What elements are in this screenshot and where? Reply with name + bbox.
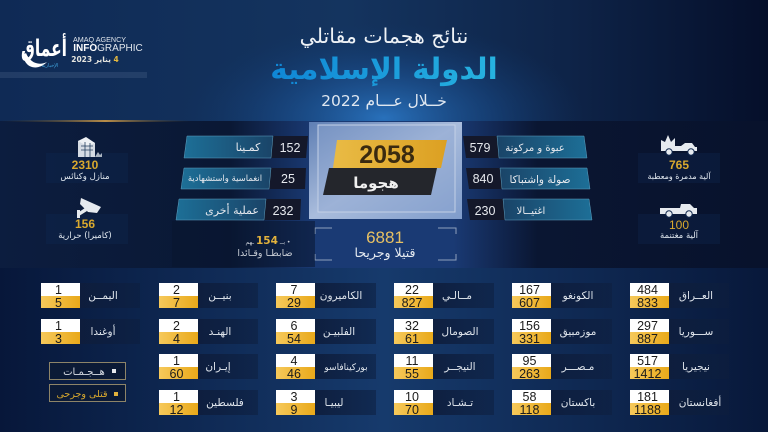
row: ambush: 152 (280, 141, 300, 155)
icon: Amaq calligraphy logo: أعماق (21, 31, 67, 62)
country: Chad: تـشـاد (447, 397, 473, 409)
black bar: attacks label: هجوما (353, 174, 399, 192)
icon: Amaq calligraphy logo: الإخبارية (42, 63, 58, 69)
country: Nigeria: 1412 (634, 367, 661, 381)
country: Philippines: الفلبيـن (323, 326, 355, 338)
country: Mozambique (512, 319, 612, 346)
row: explosive devices: 579 (470, 141, 490, 155)
country: Mali (394, 283, 494, 310)
country: Burkina Faso: 4 (291, 354, 298, 368)
country: Palestine (159, 390, 258, 417)
stat: thermal cameras: (كاميرا) حرارية (58, 231, 112, 241)
country: Palestine: 12 (170, 403, 183, 417)
country: Mali: 827 (402, 296, 422, 310)
country: Burkina Faso: 46 (287, 367, 301, 381)
row: assassination (467, 199, 592, 220)
panel: killed and wounded (315, 228, 456, 261)
country: Syria (630, 319, 729, 346)
stat: homes and churches (46, 137, 128, 183)
country: Benin: 7 (173, 296, 180, 310)
country: Yemen (41, 283, 140, 310)
country: Palestine: فلسطين (206, 397, 244, 409)
agency name: AMAQ AGENCY (73, 35, 126, 44)
row: suicide operations: انغماسية واستشهادية (188, 174, 262, 184)
column: Mali to Chad (394, 283, 494, 417)
country: Cameroon: 7 (291, 283, 298, 297)
row: assassination: اغتيــالا (517, 206, 545, 217)
country: Yemen: اليمــن (88, 290, 118, 302)
country: India: الهنـد (209, 326, 231, 338)
country: Egypt: 95 (523, 354, 536, 368)
country: Somalia: الصومال (441, 326, 479, 338)
stat: seized vehicles: 100 (669, 218, 689, 232)
country: Niger: النيجــر (443, 361, 476, 373)
stat: seized vehicles: آلية مغتنمة (660, 229, 699, 241)
country: Nigeria: نيجيريا (682, 361, 710, 373)
country: Philippines (276, 319, 376, 346)
country: Libya: 9 (291, 403, 298, 417)
country: Iran: إيـران (205, 361, 231, 373)
country: Libya: 3 (291, 390, 298, 404)
stat: homes and churches: 2310 (72, 158, 99, 172)
country: Niger: 55 (405, 367, 419, 381)
title (270, 24, 498, 110)
stat: seized vehicles (638, 204, 720, 244)
officers note (172, 221, 315, 267)
stat: homes and churches: منازل وكنائس (60, 172, 110, 182)
legend: killed and wounded: قتلى وجرحى (57, 389, 107, 400)
country: Nigeria: 517 (637, 354, 658, 368)
stat: thermal cameras (46, 198, 128, 244)
country: Iraq: العــراق (679, 290, 713, 302)
country: Yemen: 5 (55, 296, 62, 310)
country: Chad (394, 390, 494, 417)
row: raid and clashes: صولة واشتباكا (509, 174, 571, 186)
icon: surveillance camera (77, 198, 101, 218)
country grid (41, 283, 729, 417)
country: Burkina Faso (276, 354, 376, 381)
country: Uganda: 1 (55, 319, 62, 333)
country: Chad: 70 (405, 403, 419, 417)
black bar: attacks label (323, 168, 437, 195)
stat: destroyed vehicles: 765 (669, 158, 689, 172)
country: Benin (159, 283, 258, 310)
gold bar: total attacks (333, 140, 447, 169)
country: India: 4 (173, 332, 180, 346)
panel: left attack types (176, 136, 308, 220)
country: Somalia: 61 (405, 332, 419, 346)
country: Benin: 2 (173, 283, 180, 297)
country: Nigeria (630, 354, 729, 381)
icon: destroyed building (78, 137, 102, 157)
column: Benin to Palestine (159, 283, 258, 417)
country: Egypt: مـصـــر (561, 361, 594, 373)
country: Pakistan (512, 390, 612, 417)
country: India (159, 319, 258, 346)
date: 4 يناير 2023 (71, 55, 119, 64)
row: other: 232 (273, 204, 293, 218)
country: Afghanistan: 181 (637, 390, 658, 404)
heading line 1: نتائج هجمات مقاتلي (300, 24, 468, 48)
icon: exploding pickup truck (661, 135, 697, 155)
column: Congo to Pakistan (512, 283, 612, 417)
country: Syria: 887 (637, 332, 658, 346)
country: Uganda (41, 319, 140, 346)
country: Uganda: أوغندا (90, 324, 116, 338)
country: Palestine: 1 (173, 390, 180, 404)
row: explosive devices: عبوة و مركونة (505, 143, 565, 154)
frame (309, 122, 462, 219)
row: suicide operations (181, 168, 306, 189)
country: Iraq (630, 283, 729, 310)
country: Pakistan: 58 (523, 390, 536, 404)
row: raid and clashes (466, 168, 590, 189)
stat: destroyed vehicles (638, 135, 720, 183)
country: India: 2 (173, 319, 180, 333)
country: Iraq: 833 (637, 296, 658, 310)
country: Congo: 607 (519, 296, 540, 310)
panel: middle band (0, 121, 768, 268)
country: Libya (276, 390, 376, 417)
country: Benin: بنيــن (208, 290, 232, 302)
country: Mozambique: 156 (519, 319, 540, 333)
row: explosive devices (463, 136, 587, 158)
decorative gold line (0, 120, 192, 122)
country: Libya: ليبيـا (325, 397, 343, 409)
country: Philippines: 54 (287, 332, 301, 346)
row: other (176, 199, 301, 220)
country: Congo (512, 283, 612, 310)
infographic word: INFOGRAPHIC (73, 43, 143, 54)
country: Pakistan: 118 (520, 403, 540, 417)
row: raid and clashes: 840 (473, 172, 493, 186)
country: Chad: 10 (405, 390, 419, 404)
country: Cameroon (276, 283, 376, 310)
country: Somalia: 32 (405, 319, 419, 333)
row: other: عملية أخرى (205, 203, 259, 217)
country: Mozambique: 331 (519, 332, 540, 346)
country: Philippines: 6 (291, 319, 298, 333)
country: Niger: 11 (406, 354, 419, 368)
country: Iran: 1 (173, 354, 180, 368)
country: Afghanistan: أفغانستان (679, 395, 721, 409)
country: Uganda: 3 (55, 332, 62, 346)
logo: Amaq Agency infographic (0, 31, 147, 78)
country: Cameroon: 29 (287, 296, 301, 310)
country: Syria: 297 (637, 319, 658, 333)
country: Egypt (512, 354, 612, 381)
country: Mozambique: موزمبيق (560, 326, 596, 338)
heading line 2: الدولة الإسلامية (270, 52, 498, 86)
gold bar: total attacks: 2058 (359, 141, 415, 169)
officers note: • بــ 154 ـهم (246, 235, 290, 247)
column: Cameroon to Libya (276, 283, 376, 417)
heading line 3: خــلال عـــام 2022 (321, 92, 447, 110)
stat: destroyed vehicles: آلية مدمرة ومعطبة (647, 171, 711, 181)
country: Yemen: 1 (55, 283, 62, 297)
country: Iran: 60 (170, 367, 183, 381)
row: suicide operations: 25 (281, 172, 295, 186)
country: Niger (394, 354, 494, 381)
legend: attacks: هــجـمـات (63, 367, 105, 378)
row: ambush: كمـينا (236, 141, 261, 154)
country: Congo: 167 (519, 283, 540, 297)
icon: pickup truck (660, 204, 697, 217)
country: Pakistan: باكستان (561, 397, 595, 409)
country: Congo: الكونغو (562, 290, 593, 302)
total killed label: قتيلا وجريحا (355, 245, 416, 261)
panel: central total (309, 122, 462, 219)
panel: right attack types (463, 136, 592, 220)
officers note: ضابطـا وقـائدا (237, 248, 293, 259)
country: Mali: مــالـي (442, 290, 472, 302)
country: Afghanistan (630, 390, 729, 417)
total killed number: 6881 (366, 228, 404, 247)
country: Afghanistan: 1188 (634, 403, 661, 417)
country: Mali: 22 (405, 283, 419, 297)
row: assassination: 230 (475, 204, 495, 218)
column: Iraq to Afghanistan (630, 283, 729, 417)
country: Iran (159, 354, 258, 381)
stat: thermal cameras: 156 (75, 217, 95, 231)
row: ambush (184, 136, 308, 158)
country: Somalia (394, 319, 494, 346)
legend (50, 362, 126, 402)
country: Syria: ســـوريا (679, 326, 713, 338)
country: Iraq: 484 (637, 283, 658, 297)
column: Yemen and Uganda (41, 283, 140, 346)
country: Burkina Faso: بوركينافاسو (323, 363, 368, 373)
country: Egypt: 263 (519, 367, 540, 381)
country: Cameroon: الكاميرون (320, 290, 362, 302)
